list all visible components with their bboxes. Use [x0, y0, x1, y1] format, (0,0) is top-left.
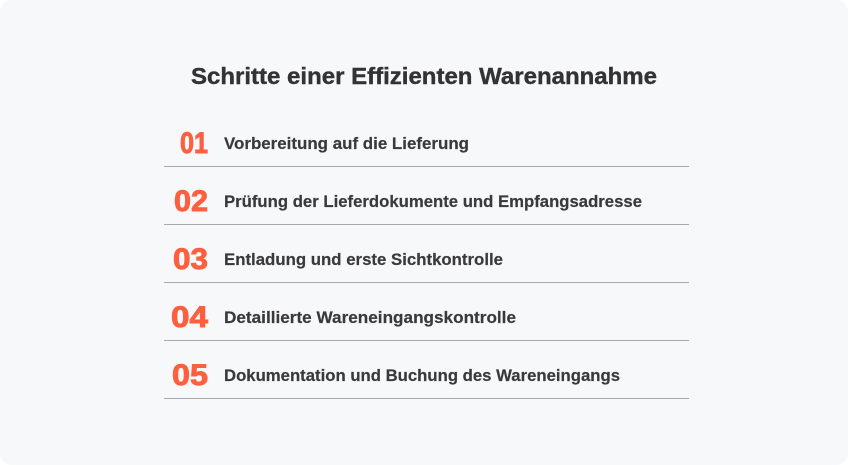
step number 04: 04: [171, 301, 208, 334]
title: Schritte einer Effizienten Warenannahme: [191, 63, 657, 89]
step label 04: Detaillierte Wareneingangskontrolle: [224, 308, 516, 327]
step number 02: 02: [174, 185, 208, 218]
step 03: [164, 243, 689, 283]
step 01: [164, 127, 689, 167]
step label 01: Vorbereitung auf die Lieferung: [224, 134, 469, 153]
step 02: [164, 185, 689, 225]
step number 05: 05: [172, 359, 208, 392]
step label 02: Prüfung der Lieferdokumente und Empfangsadresse: [224, 192, 642, 211]
step number 03: 03: [173, 243, 208, 276]
step 05: [164, 359, 689, 399]
step number 01: 01: [180, 127, 208, 160]
step 04: [164, 301, 689, 341]
step label 03: Entladung und erste Sichtkontrolle: [224, 250, 503, 269]
step label 05: Dokumentation und Buchung des Wareneingangs: [224, 366, 620, 385]
